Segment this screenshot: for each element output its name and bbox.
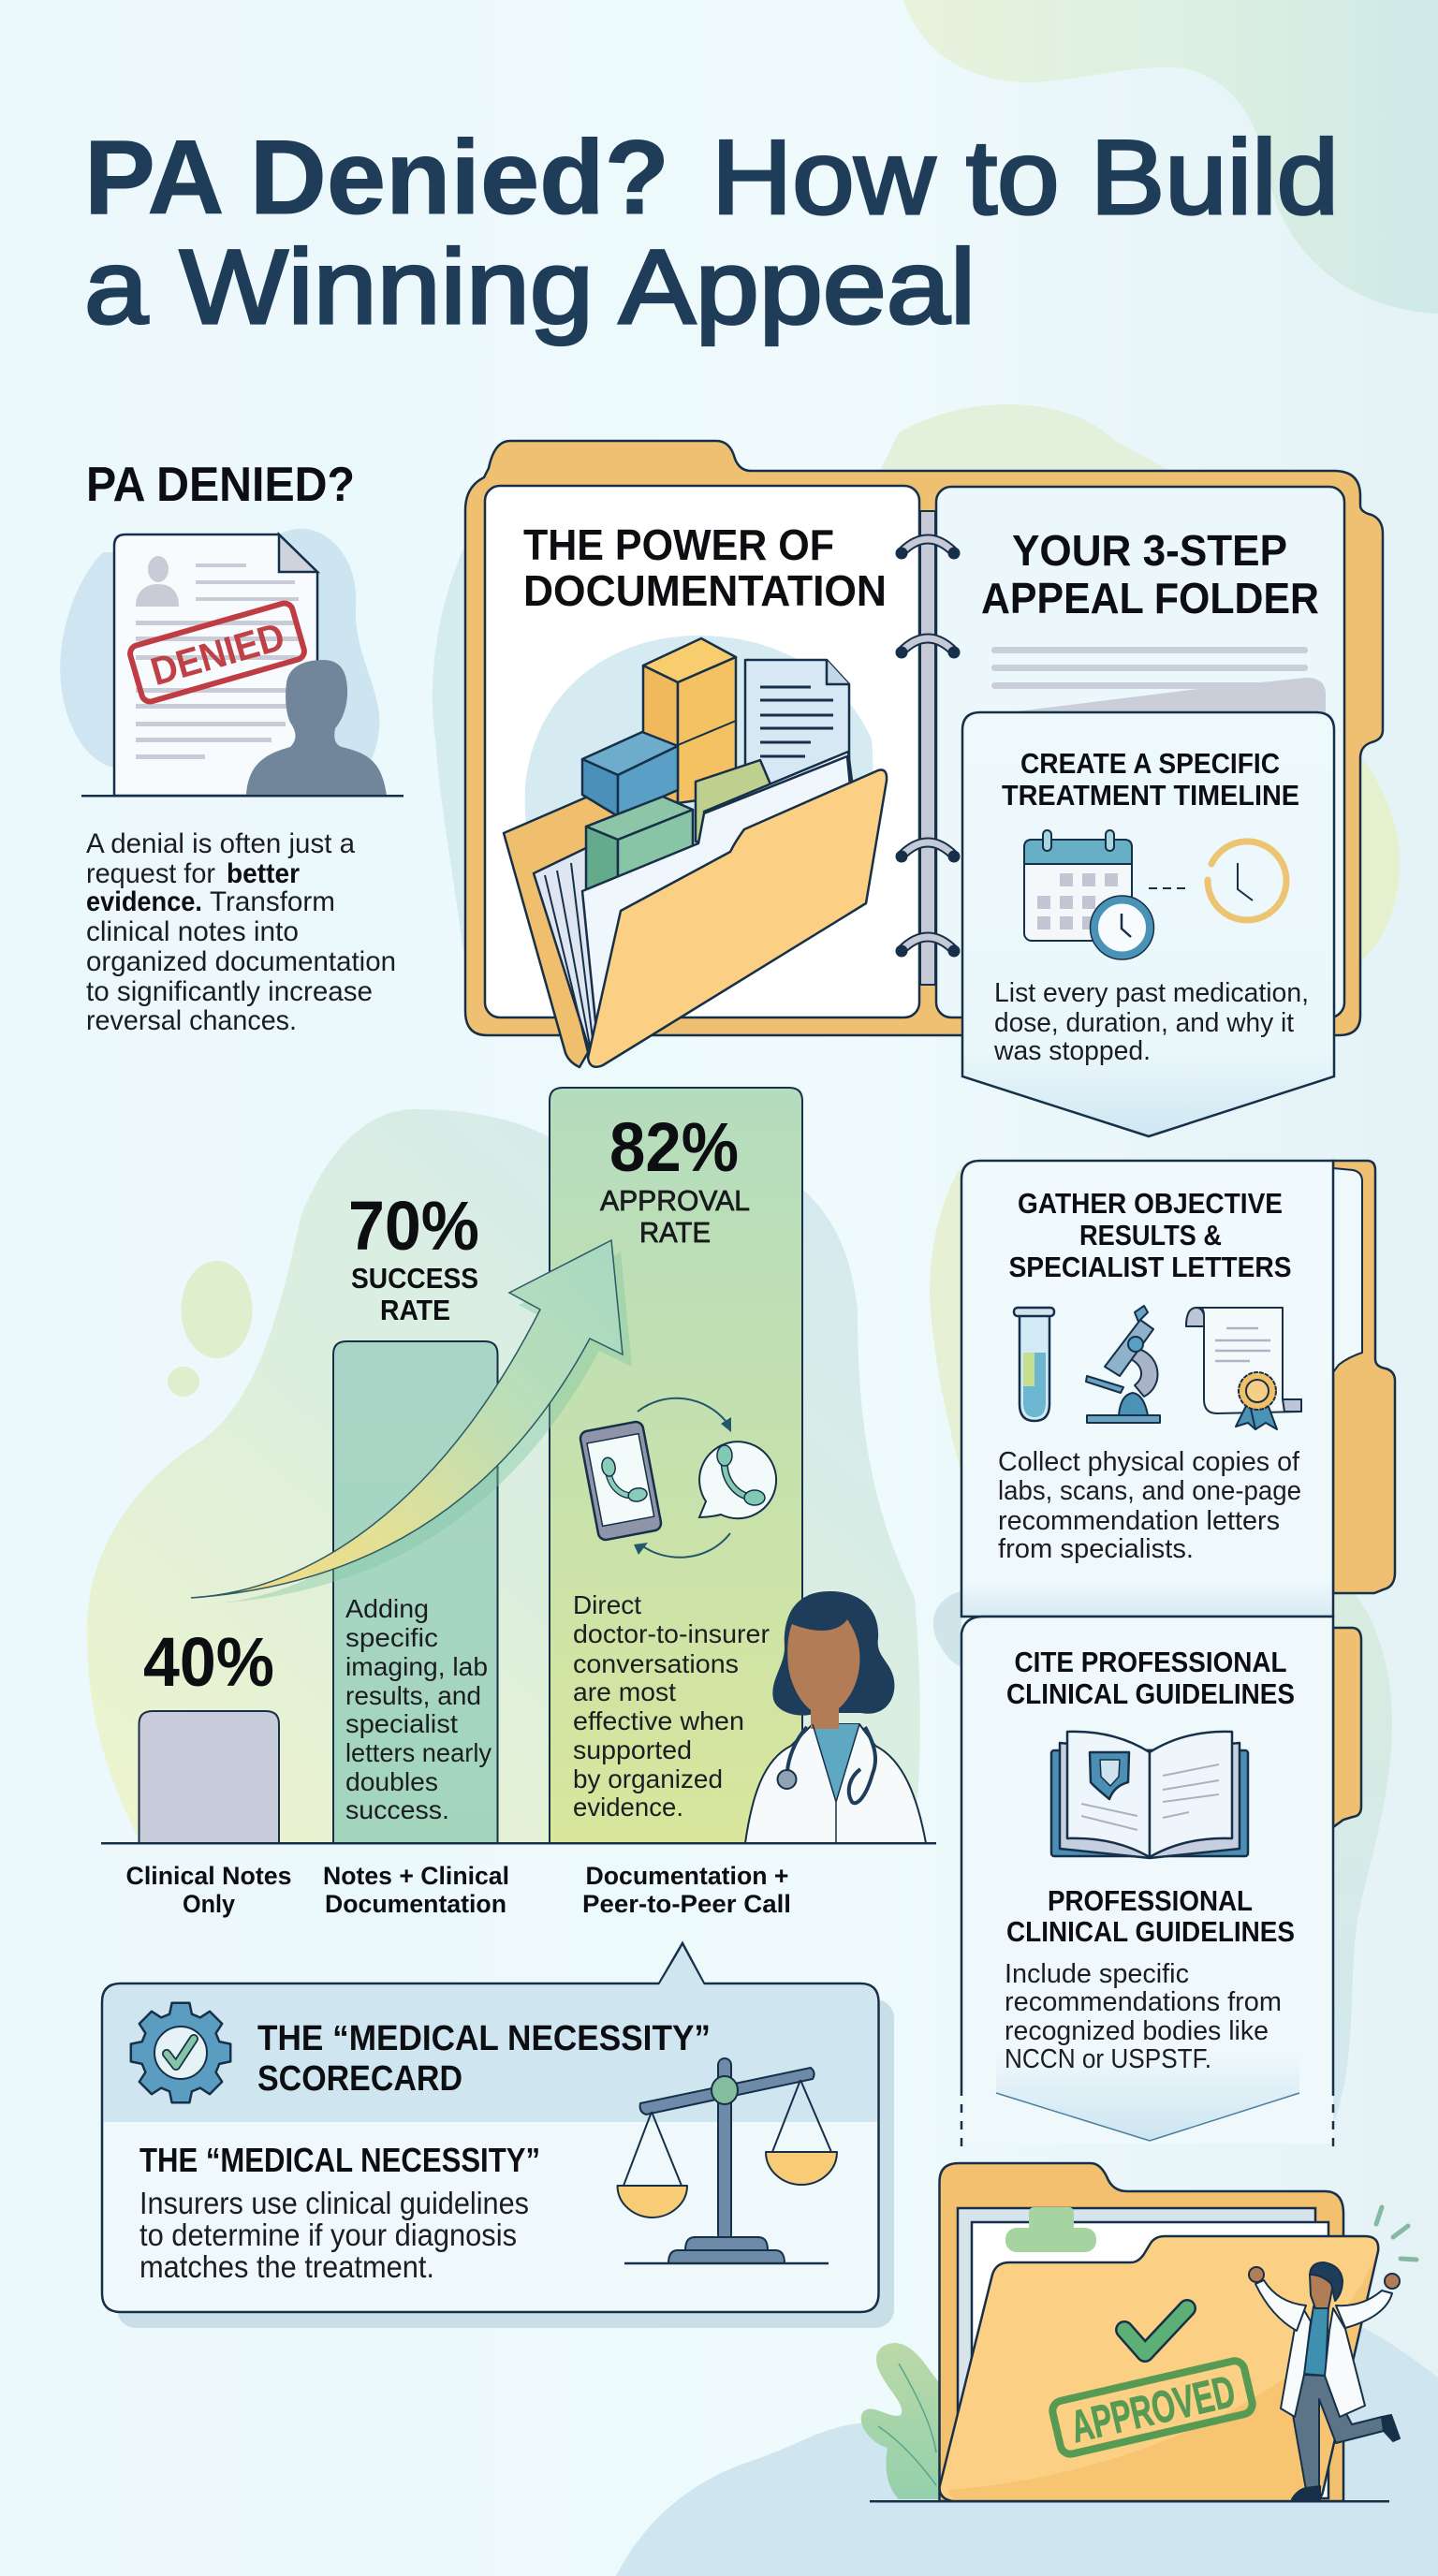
front folder — [939, 2236, 1378, 2501]
step 2 card — [961, 1161, 1333, 1617]
text: bar 2 description: doubles — [345, 1767, 438, 1796]
panel: medical necessity scorecard — [102, 1943, 894, 2328]
text: denial explanation: better — [227, 858, 300, 889]
text: denial explanation: evidence. — [86, 886, 202, 917]
axis label: documentation plus peer call: Documentation + — [586, 1862, 788, 1890]
back folder — [940, 2163, 1343, 2501]
text: step 3 — [1005, 1959, 1282, 2074]
text: bar 3 description: evidence. — [573, 1793, 683, 1822]
chevron: step 3 — [996, 2050, 1299, 2141]
subheading: professional clinical guidelines: PROFESSIONAL — [1048, 1884, 1253, 1917]
text: step 3: Include specific — [1005, 1959, 1189, 1989]
bar chart: approval rates — [101, 1088, 936, 1918]
text: step 2: from specialists. — [998, 1534, 1194, 1564]
text: denial explanation: Transform — [210, 886, 335, 917]
axis label: notes plus clinical documentation: Notes + Clinical — [323, 1862, 509, 1890]
text: bar 2 description: results, and — [345, 1681, 481, 1710]
axis label: clinical notes only: Clinical Notes — [125, 1862, 292, 1890]
heading: scorecard: SCORECARD — [257, 2059, 462, 2099]
heading: the power of documentation: THE POWER OF — [523, 520, 834, 569]
icon: test tube — [1014, 1308, 1054, 1421]
axis label: documentation plus peer call: Peer-to-Peer Call — [582, 1890, 791, 1918]
motion lines — [1376, 2207, 1416, 2260]
documents inside folder — [958, 2207, 1328, 2498]
panel: PA denied — [60, 458, 404, 1036]
icon: female doctor — [745, 1591, 926, 1843]
text: step 1: dose, duration, and why it — [994, 1008, 1294, 1038]
text: step 3: recommendations from — [1005, 1987, 1282, 2017]
left page — [485, 486, 919, 1017]
text: denial explanation: reversal chances. — [86, 1005, 297, 1036]
panel: binder folder — [465, 441, 1383, 1067]
axis label: clinical notes only — [125, 1862, 292, 1918]
text: bar 3 description: Direct — [573, 1590, 641, 1619]
text: bar 3 description: doctor-to-insurer — [573, 1619, 770, 1648]
heading: your 3-step appeal folder: APPEAL FOLDER — [981, 574, 1319, 622]
heading: scorecard — [257, 2019, 711, 2099]
title: How to Build — [712, 119, 1339, 236]
panel: step 3 clinical guidelines — [961, 1617, 1361, 2147]
label: 70 percent success rate: 70% — [348, 1187, 479, 1265]
binder cover — [465, 441, 1383, 1035]
heading: your 3-step appeal folder — [981, 526, 1319, 622]
binder spine — [920, 511, 935, 985]
subheading: professional clinical guidelines: CLINICAL GUIDELINES — [1006, 1915, 1295, 1948]
text: denial explanation — [86, 828, 396, 1036]
heading: step 2: GATHER OBJECTIVE — [1018, 1187, 1283, 1220]
text: bar 3 description: effective when — [573, 1706, 744, 1735]
text: bar 2 description: imaging, lab — [345, 1652, 488, 1681]
axis label: notes plus clinical documentation: Documentation — [325, 1890, 506, 1918]
heading: scorecard: THE “MEDICAL NECESSITY” — [257, 2019, 711, 2058]
label: 82 percent approval rate: APPROVAL — [600, 1184, 750, 1217]
icon: microscope — [1086, 1306, 1160, 1423]
axis line — [101, 1842, 936, 1844]
text: step 2: recommendation letters — [998, 1506, 1280, 1536]
heading: your 3-step appeal folder: YOUR 3-STEP — [1012, 526, 1287, 575]
panel: step 1 treatment timeline — [962, 712, 1334, 1136]
text: step 1 — [993, 978, 1309, 1066]
heading: step 3: CLINICAL GUIDELINES — [1006, 1677, 1295, 1710]
icon: open book with shield — [1051, 1732, 1248, 1858]
icon: leaf — [861, 2343, 939, 2499]
heading: step 1 — [1002, 747, 1299, 812]
text: step 2: Collect physical copies of — [998, 1447, 1300, 1477]
title: a Winning Appeal — [84, 228, 976, 345]
text: bar 3 description: supported — [573, 1735, 692, 1764]
text: insurers explanation: to determine if your diagnosis — [139, 2217, 517, 2252]
label: 70 percent success rate — [348, 1187, 479, 1326]
text: denial explanation: to significantly increase — [86, 976, 373, 1007]
label: 70 percent success rate: RATE — [380, 1294, 450, 1326]
arrow: rising trend — [191, 1240, 632, 1604]
heading: the power of documentation — [523, 520, 887, 615]
heading: step 2: SPECIALIST LETTERS — [1009, 1251, 1292, 1283]
text: step 3: NCCN or USPSTF. — [1005, 2044, 1211, 2074]
text: denial explanation: A denial is often just a — [86, 828, 355, 859]
text: bar 3 description: are most — [573, 1677, 676, 1706]
heading: step 1: CREATE A SPECIFIC — [1020, 747, 1280, 780]
text: insurers explanation: Insurers use clinical guidelines — [139, 2186, 529, 2220]
text: insurers explanation: matches the treatment. — [139, 2249, 434, 2284]
text: bar 3 description: by organized — [573, 1764, 723, 1793]
stamp: approved: APPROVED — [1066, 2367, 1240, 2452]
card header band — [103, 1946, 877, 2122]
text: step 2 — [998, 1447, 1301, 1564]
text: step 2: labs, scans, and one-page — [998, 1476, 1301, 1506]
axis label: notes plus clinical documentation — [323, 1862, 509, 1918]
icon: calendar and clock — [1024, 830, 1286, 959]
label: 82 percent approval rate: RATE — [639, 1216, 711, 1249]
icon: denied document with stamp and silhouette — [60, 529, 404, 798]
icon: open folder with boxes — [504, 636, 887, 1067]
right page — [936, 487, 1344, 1017]
text: denial explanation: organized documentation — [86, 946, 396, 977]
illustration: approved folder — [861, 2163, 1416, 2503]
label: 70 percent success rate: SUCCESS — [351, 1262, 478, 1295]
icon: gear with checkmark — [131, 2003, 230, 2102]
text: bar 2 description: specialist — [345, 1709, 458, 1738]
step 3 card — [961, 1617, 1333, 2144]
text: step 1: was stopped. — [993, 1036, 1151, 1066]
folder tab: step 2 — [1333, 1161, 1395, 1593]
text: bar 2 description: success. — [345, 1795, 449, 1824]
text: insurers explanation — [139, 2186, 529, 2284]
title: PA Denied? — [84, 119, 669, 236]
text: bar 2 description: specific — [345, 1623, 438, 1652]
binder rings — [895, 539, 961, 957]
subheading: professional clinical guidelines — [1006, 1884, 1295, 1948]
card shadow — [117, 1999, 894, 2328]
heading: step 2 — [1009, 1187, 1292, 1283]
subheading: medical necessity: THE “MEDICAL NECESSITY” — [139, 2141, 540, 2179]
step 1 card — [962, 712, 1334, 1136]
text: step 3: recognized bodies like — [1005, 2016, 1269, 2046]
label: 40 percent: 40% — [143, 1623, 274, 1701]
heading: the power of documentation: DOCUMENTATION — [523, 566, 887, 615]
icon: denied document with stamp and silhouette: DENIED — [146, 614, 289, 694]
axis label: documentation plus peer call — [582, 1862, 791, 1918]
text: bar 2 description: Adding — [345, 1594, 429, 1623]
icon: phone and call bubble — [580, 1398, 776, 1558]
bar: notes and documentation — [333, 1341, 498, 1843]
text: denial explanation: request for — [86, 858, 215, 889]
icon: celebrating doctor — [1249, 2262, 1400, 2500]
heading: step 3: CITE PROFESSIONAL — [1015, 1646, 1286, 1678]
text: bar 3 description — [573, 1590, 770, 1822]
icon: certificate with ribbon — [1186, 1308, 1301, 1429]
text: bar 2 description — [345, 1594, 492, 1824]
heading: step 1: TREATMENT TIMELINE — [1002, 779, 1299, 812]
heading: PA denied: PA DENIED? — [86, 458, 355, 512]
bar: clinical notes only — [139, 1711, 279, 1843]
stamp: approved — [1050, 2359, 1255, 2456]
axis label: clinical notes only: Only — [183, 1890, 235, 1918]
heading: step 2: RESULTS & — [1079, 1219, 1222, 1251]
label: 82 percent approval rate — [600, 1108, 750, 1249]
label: 82 percent approval rate: 82% — [609, 1108, 739, 1186]
title — [84, 119, 1339, 345]
folder tab: step 3 — [1333, 1628, 1361, 1827]
text: bar 2 description: letters nearly — [345, 1738, 492, 1767]
card body — [102, 1943, 878, 2312]
ground line — [870, 2500, 1389, 2503]
icon: balance scale — [618, 2058, 837, 2263]
text: step 1: List every past medication, — [994, 978, 1309, 1008]
heading: step 3 — [1006, 1646, 1295, 1710]
icon: green checkmark — [1124, 2308, 1187, 2353]
bar: documentation and peer call — [550, 1088, 802, 1843]
text: denial explanation: clinical notes into — [86, 916, 299, 947]
decorative page lines — [991, 647, 1326, 713]
text: bar 3 description: conversations — [573, 1649, 739, 1678]
panel: step 2 objective results — [961, 1161, 1395, 1617]
